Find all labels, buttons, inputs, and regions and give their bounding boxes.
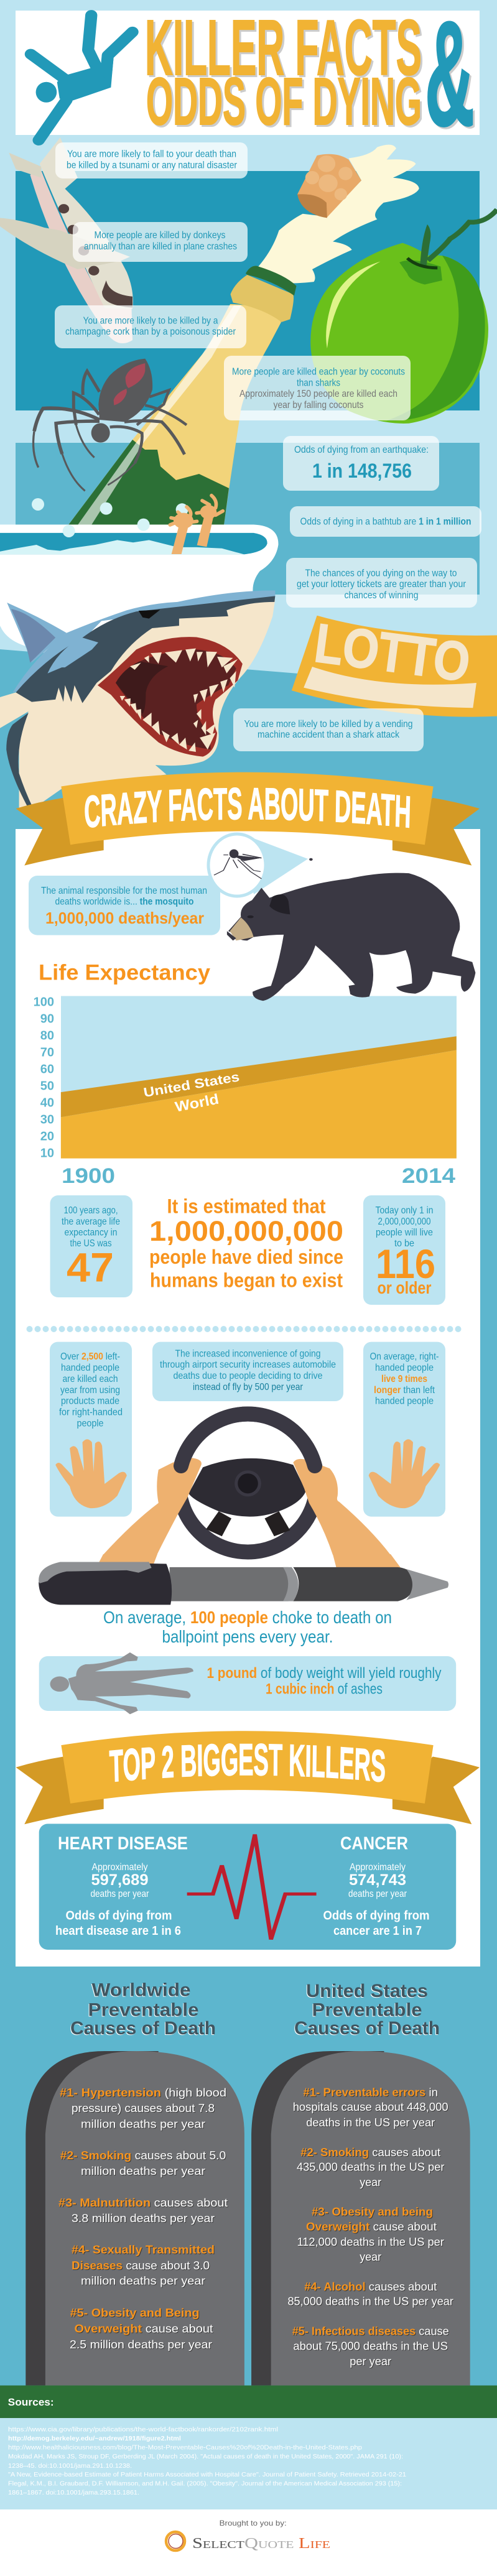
callout: airport security: deaths due to people deciding to drive: [173, 1371, 323, 1381]
callout: bathtub odds: Odds of dying in a bathtub are 1 in 1 million: [300, 516, 471, 527]
area chart: life expectancy: United States: [142, 1070, 241, 1100]
sources list: http://www.healthaliciousness.com/blog/The-Most-Preventable-Causes%20of%20Death-in-the-United-States.php: [8, 2444, 362, 2452]
tombstone: US causes: per year: [350, 2355, 391, 2368]
logo: SelectQuote Life: Select Quote Life: [192, 2536, 330, 2552]
illustration: black bear: [227, 873, 475, 1001]
heart disease stats: heart disease are 1 in 6: [55, 1924, 181, 1938]
cancer stats: cancer are 1 in 7: [333, 1924, 422, 1938]
tombstone: worldwide causes: #2- Smoking causes about 5.0: [60, 2149, 226, 2162]
callout: lottery: The chances of you dying on the way to: [305, 568, 457, 578]
illustration: green coconut: [310, 210, 497, 424]
heart disease stats: deaths per year: [91, 1889, 149, 1899]
area chart: life expectancy: 30: [40, 1113, 54, 1126]
callout: fall to your death: be killed by a tsunami or any natural disaster: [67, 160, 238, 170]
icon: right hand: [369, 1439, 440, 1508]
tombstone: US causes: #5- Infectious diseases cause: [292, 2325, 449, 2337]
callout: bathtub odds: [290, 506, 481, 537]
sources list: 1238–45. doi:10.1001/jama.291.10.1238.: [8, 2462, 132, 2470]
chart heading: life expectancy: Life Expectancy: [39, 960, 211, 985]
text: ballpoint pen fact: [103, 1608, 392, 1646]
heart disease stats: Odds of dying from: [66, 1909, 172, 1923]
stat box: left-handed people: handed people: [61, 1363, 119, 1373]
area chart: life expectancy: 1900: [62, 1164, 115, 1188]
tombstone: US causes: deaths in the US per year: [306, 2116, 435, 2129]
stat box: 116 or older: people will live: [376, 1228, 433, 1238]
stat box: right-handed people: handed people: [375, 1363, 434, 1373]
area chart: life expectancy: 80: [40, 1029, 54, 1043]
icon: human silhouette: [50, 1652, 193, 1714]
area chart: life expectancy: World: [174, 1091, 220, 1115]
heading: united states preventable causes: Preventable: [312, 2000, 422, 2020]
callout: coconuts: year by falling coconuts: [274, 400, 363, 410]
cancer stats: Odds of dying from: [323, 1909, 429, 1923]
headline stat: one billion deaths: [149, 1195, 343, 1291]
illustration: champagne bottle: [68, 145, 419, 525]
stat box: left-handed people: [50, 1342, 132, 1517]
callout: coconuts: Approximately 150 people are killed each: [239, 389, 397, 399]
stat box: 116 or older: Today only 1 in: [376, 1205, 433, 1216]
tombstone: worldwide causes: million deaths per year: [81, 2164, 205, 2177]
callout: lottery: chances of winning: [345, 590, 418, 601]
tombstone: US causes: 435,000 deaths in the US per: [297, 2161, 444, 2174]
area chart: life expectancy: 20: [40, 1129, 54, 1143]
panel: heart disease and cancer: [39, 1823, 456, 1950]
text: ballpoint pen fact: ballpoint pens every year.: [162, 1627, 333, 1646]
heart disease stats: 597,689: [91, 1871, 148, 1889]
tombstone: worldwide causes: #1- Hypertension (high blood: [60, 2086, 226, 2099]
area chart: life expectancy: 60: [40, 1063, 54, 1077]
heading: united states preventable causes: Causes of Death: [294, 2018, 440, 2039]
callout: earthquake odds: [283, 436, 439, 491]
stat box: left-handed people: people: [77, 1418, 104, 1429]
stat box: left-handed people: products made: [61, 1396, 119, 1407]
icon: left hand: [55, 1439, 127, 1508]
heading: worldwide preventable causes: Preventable: [88, 2000, 199, 2020]
tombstone: US causes: about 75,000 deaths in the US: [293, 2340, 448, 2352]
stat box: 47 life expectancy: expectancy in: [65, 1228, 117, 1238]
callout: fall to your death: [55, 142, 248, 178]
callout: donkeys: annually than are killed in plane crashes: [84, 241, 237, 252]
sources list: "A New, Evidence-based Estimate of Patient Harms Associated with Hospital Care". Journal of Patient Safety. Retrieved 2014-02-21: [8, 2471, 406, 2478]
tombstone: worldwide causes: Diseases cause about 3.0: [72, 2259, 210, 2272]
heading: united states preventable causes: United States: [306, 1981, 428, 2001]
callout: airport security: through airport security increases automobile: [160, 1360, 336, 1370]
callout: mosquito: [29, 876, 220, 935]
tombstone: US causes: Overweight cause about: [306, 2220, 437, 2233]
tombstone: worldwide causes: million deaths per year: [81, 2274, 205, 2287]
callout: lottery: [286, 558, 477, 608]
heading: worldwide preventable causes: [70, 1980, 216, 2039]
tombstone: US causes: [251, 2051, 470, 2386]
stat box: 47 life expectancy: the US was: [70, 1238, 112, 1249]
tombstone: worldwide causes: #4- Sexually Transmitted: [72, 2243, 215, 2256]
tombstone: worldwide causes: Overweight cause about: [75, 2322, 213, 2335]
area chart: life expectancy: 100: [34, 996, 54, 1009]
cancer stats: [323, 1833, 429, 1938]
banner: top 2 biggest killers: TOP 2 BIGGEST KILLERS: [109, 1743, 385, 1782]
area chart: life expectancy: 90: [40, 1012, 54, 1026]
stat box: right-handed people: handed people: [375, 1396, 434, 1407]
tombstone: worldwide causes: 3.8 million deaths per year: [72, 2212, 215, 2225]
tombstone: US causes: 112,000 deaths in the US per: [297, 2235, 444, 2248]
banner: crazy facts about death: CRAZY FACTS ABOUT DEATH: [85, 787, 411, 828]
stat box: left-handed people: are killed each: [62, 1374, 118, 1384]
lighter teal background block: [16, 443, 480, 595]
sources list: 1861–1867. doi:10.1001/jama.293.15.1861.: [8, 2489, 139, 2496]
callout: donkeys: [73, 222, 248, 262]
cancer stats: CANCER: [340, 1833, 408, 1853]
callout: champagne cork: You are more likely to be killed by a: [83, 316, 218, 326]
tombstone: worldwide causes: #3- Malnutrition causes about: [58, 2196, 228, 2209]
callout: airport security: instead of fly by 500 per year: [193, 1382, 304, 1392]
tombstone: US causes: #1- Preventable errors in: [303, 2086, 438, 2098]
logo: SelectQuote Life: [166, 2532, 330, 2552]
callout: coconuts: More people are killed each year by coconuts: [232, 367, 405, 378]
stat box: 47 life expectancy: 100 years ago,: [63, 1205, 118, 1216]
tombstone: worldwide causes: 2.5 million deaths per year: [70, 2338, 212, 2351]
stat box: 116 or older: to be: [394, 1238, 414, 1249]
headline stat: one billion deaths: It is estimated that: [167, 1195, 326, 1218]
stat box: right-handed people: longer than left: [374, 1385, 435, 1396]
tombstone: US causes: year: [360, 2175, 381, 2189]
area chart: life expectancy: 10: [40, 1147, 54, 1161]
tombstone: US causes: #3- Obesity and being: [312, 2205, 433, 2218]
illustration: steering wheel and arms: [96, 1414, 401, 1568]
callout: earthquake odds: Odds of dying from an earthquake:: [294, 445, 429, 455]
brought to you by: Brought to you by:: [220, 2519, 287, 2527]
area chart: life expectancy: 70: [40, 1045, 54, 1059]
tombstone: US causes: year: [360, 2250, 381, 2263]
teal background block: [16, 171, 480, 410]
icon: falling stick figure: [30, 16, 132, 140]
stat box: 47 life expectancy: the average life: [62, 1216, 120, 1227]
illustration: airplane: [0, 137, 133, 343]
callout: champagne cork: champagne cork than by a poisonous spider: [65, 327, 236, 337]
stat box: left-handed people: Over 2,500 left-: [60, 1351, 120, 1362]
tombstone: worldwide causes: pressure) causes about 7.8: [72, 2101, 215, 2115]
callout: mosquito: 1,000,000 deaths/year: [45, 909, 204, 927]
header panel: [16, 11, 480, 135]
sources list: Flegal, K.M., B.I. Graubard, D.F. Williamson, and M.H. Gail. (2005). "Obesity". Journal of the American Medical Association 293 (15):: [8, 2480, 402, 2487]
callout: mosquito: The animal responsible for the most human: [41, 886, 207, 896]
illustration: shark: [0, 590, 275, 808]
cancer stats: deaths per year: [348, 1889, 407, 1899]
stat box: right-handed people: [363, 1342, 445, 1517]
callout: coconuts: [224, 356, 411, 420]
sources heading band: [0, 2386, 497, 2418]
sources list: Mokdad AH, Marks JS, Stroup DF, Gerberding JL (March 2004). "Actual causes of death in the United States, 2000". JAMA 291 (10):: [8, 2453, 403, 2460]
heading: worldwide preventable causes: Worldwide: [92, 1980, 190, 2001]
area chart: life expectancy: 50: [40, 1079, 54, 1093]
heading: united states preventable causes: [294, 1981, 440, 2039]
stat box: 47 life expectancy: 47: [67, 1244, 114, 1290]
panel: body weight to ashes: 1 cubic inch of ashes: [266, 1680, 383, 1698]
illustration: black widow spider: [33, 359, 187, 491]
sources list: http://demog.berkeley.edu/~andrew/1918/figure2.html: [8, 2435, 181, 2442]
callout: lottery: get your lottery tickets are greater than your: [297, 579, 467, 590]
footer panel: [0, 2509, 497, 2576]
callout: vending machine: [233, 708, 424, 751]
cancer stats: Approximately: [350, 1862, 406, 1873]
area chart: life expectancy: 40: [40, 1096, 54, 1110]
stat box: 116 or older: 2,000,000,000: [378, 1216, 431, 1227]
stat box: right-handed people: On average, right-: [369, 1351, 439, 1362]
sources list: [8, 2425, 406, 2496]
illustration: bathtub: [0, 525, 278, 674]
stat box: 116 or older: [363, 1195, 445, 1305]
headline stat: one billion deaths: people have died since: [149, 1246, 343, 1268]
white content panel: [16, 829, 480, 1967]
heart disease stats: Approximately: [92, 1862, 148, 1873]
stat box: left-handed people: for right-handed: [59, 1407, 123, 1417]
illustration: lotto ticket: LOTTO: [312, 612, 473, 693]
callout: fall to your death: You are more likely to fall to your death than: [67, 149, 236, 160]
callout: vending machine: machine accident than a shark attack: [258, 730, 400, 740]
callout: donkeys: More people are killed by donkeys: [95, 230, 225, 241]
tombstone: US causes: 85,000 deaths in the US per year: [287, 2295, 453, 2308]
tombstone: worldwide causes: [26, 2051, 244, 2386]
callout: mosquito: deaths worldwide is... the mosquito: [55, 897, 194, 907]
tombstone: US causes: #4- Alcohol causes about: [304, 2280, 437, 2293]
title: [145, 0, 475, 157]
illustration: ballpoint pen: [39, 1562, 448, 1605]
chart: heartbeat line: [187, 1835, 317, 1939]
callout: vending machine: You are more likely to be killed by a vending: [244, 719, 413, 730]
heart disease stats: [55, 1833, 188, 1938]
stat box: left-handed people: year from using: [60, 1385, 120, 1396]
sources heading band: Sources:: [8, 2396, 54, 2408]
stat box: 47 life expectancy: [50, 1195, 132, 1297]
stat box: 116 or older: or older: [377, 1278, 432, 1297]
stat box: right-handed people: live 9 times: [381, 1374, 427, 1384]
sources list: https://www.cia.gov/library/publications/the-world-factbook/rankorder/2102rank.html: [8, 2425, 278, 2433]
heading: worldwide preventable causes: Causes of Death: [70, 2018, 216, 2039]
illustration: drowning hands and bubbles: [32, 496, 223, 554]
area chart: life expectancy: 2014: [402, 1164, 455, 1188]
banner: top 2 biggest killers: [16, 1731, 480, 1825]
tombstone: worldwide causes: million deaths per year: [81, 2118, 205, 2131]
heart disease stats: HEART DISEASE: [58, 1833, 188, 1853]
panel: body weight to ashes: 1 pound of body weight will yield roughly: [207, 1665, 442, 1682]
text: ballpoint pen fact: On average, 100 people choke to death on: [103, 1608, 392, 1627]
headline stat: one billion deaths: humans began to exist: [150, 1269, 343, 1291]
stat box: 116 or older: 116: [376, 1241, 435, 1287]
callout: airport security: [152, 1342, 343, 1401]
tombstone: US causes: hospitals cause about 448,000: [293, 2100, 448, 2113]
tombstone: worldwide causes: #5- Obesity and Being: [70, 2306, 200, 2319]
callout: champagne cork: [55, 305, 246, 348]
headline stat: one billion deaths: 1,000,000,000: [149, 1215, 343, 1247]
banner: crazy facts about death: [16, 772, 480, 866]
callout: earthquake odds: 1 in 148,756: [312, 460, 412, 482]
tombstone: US causes: #2- Smoking causes about: [300, 2146, 440, 2159]
area chart: life expectancy: [34, 996, 457, 1188]
callout: airport security: The increased inconvenience of going: [175, 1349, 321, 1360]
panel: body weight to ashes: [39, 1652, 456, 1714]
callout: coconuts: than sharks: [297, 378, 340, 388]
mosquito magnifier bubble: [208, 834, 312, 896]
cancer stats: 574,743: [349, 1871, 406, 1889]
